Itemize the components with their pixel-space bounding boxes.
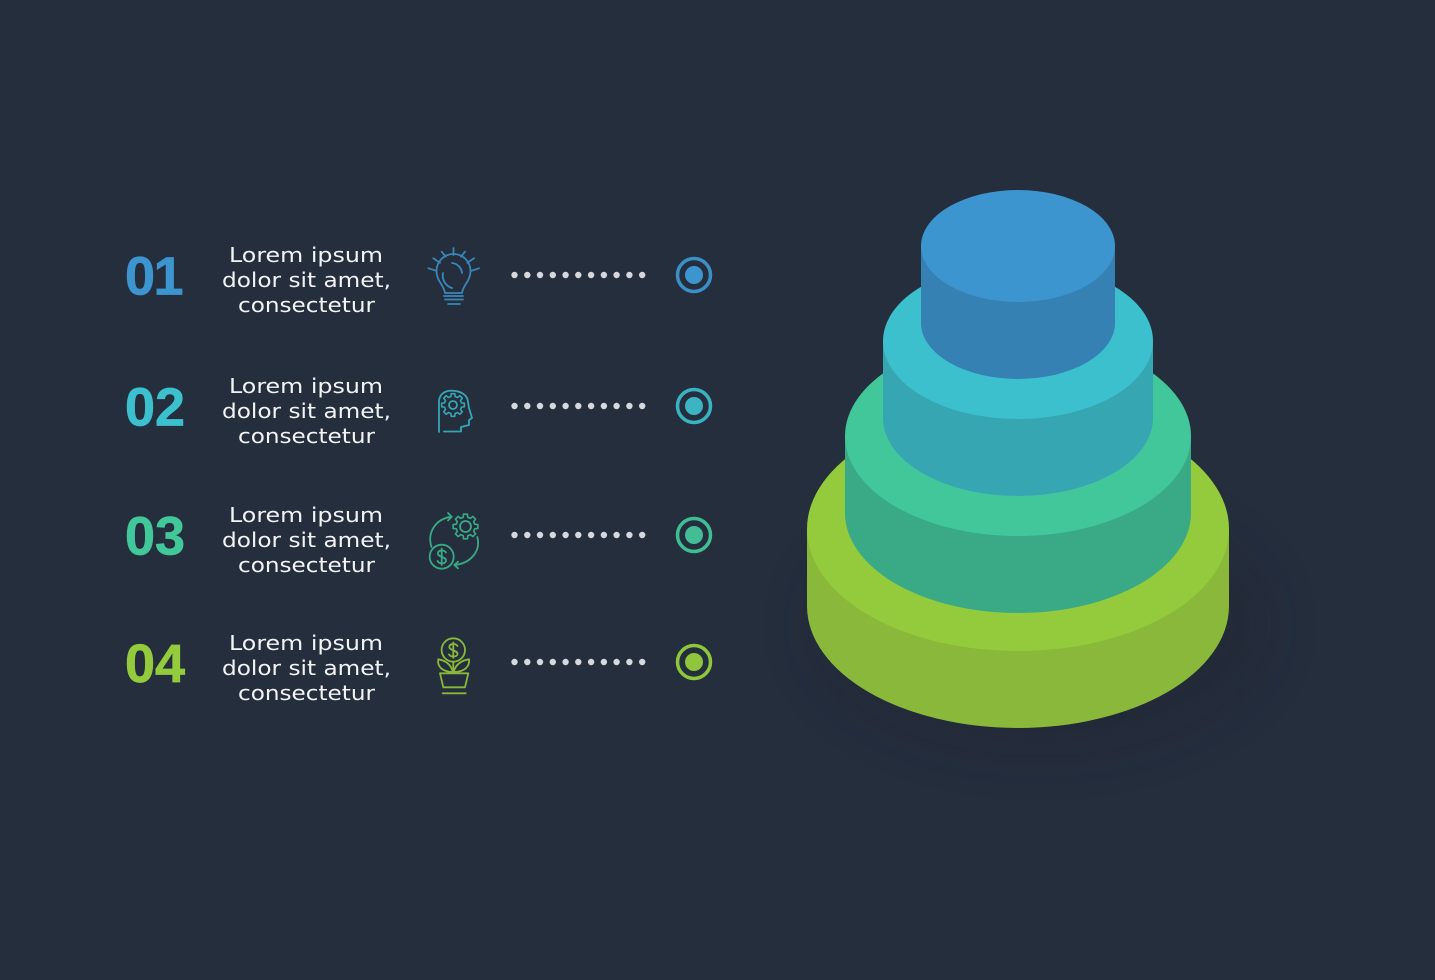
- icon: money plant: [438, 638, 469, 693]
- text block 3: [222, 503, 391, 577]
- text block 4: Lorem ipsum: [229, 631, 383, 655]
- text block 4: dolor sit amet,: [222, 656, 391, 680]
- dotted connector 2: [511, 403, 645, 409]
- text block 2: dolor sit amet,: [222, 399, 391, 423]
- text block 1: [222, 243, 391, 317]
- marker 1: [678, 258, 710, 292]
- marker 4: [678, 646, 710, 678]
- text block 3: Lorem ipsum: [229, 503, 383, 527]
- text block 3: dolor sit amet,: [222, 528, 391, 552]
- text block 1: consectetur: [238, 293, 376, 317]
- row 4: [125, 631, 710, 705]
- icon: head with gear: [439, 391, 472, 432]
- text block 3: consectetur: [238, 553, 376, 577]
- tier 4: green: [807, 407, 1229, 728]
- text block 4: consectetur: [238, 681, 376, 705]
- number 01: 01: [125, 246, 184, 306]
- text block 1: Lorem ipsum: [229, 243, 383, 267]
- drop shadow: [815, 503, 1265, 747]
- row 1: [125, 243, 710, 317]
- marker 2: [678, 390, 710, 422]
- text block 1: dolor sit amet,: [222, 268, 391, 292]
- number 04: 04: [125, 634, 185, 694]
- text block 2: [222, 374, 391, 448]
- row 2: [125, 374, 710, 448]
- number 02: 02: [125, 378, 185, 438]
- icon: gear and money cycle: [430, 513, 478, 569]
- number 03: 03: [125, 506, 185, 566]
- stacked cylinder chart: [807, 190, 1265, 747]
- tier 2: cyan: [883, 263, 1153, 496]
- text block 4: [222, 631, 391, 705]
- row 3: [125, 503, 710, 577]
- dotted connector 1: [511, 272, 645, 278]
- icon: light bulb: [428, 248, 479, 304]
- text block 2: consectetur: [238, 424, 376, 448]
- dotted connector 3: [511, 532, 645, 538]
- tier 3: teal green: [845, 336, 1191, 613]
- text block 2: Lorem ipsum: [229, 374, 383, 398]
- marker 3: [678, 518, 710, 552]
- dotted connector 4: [511, 659, 645, 665]
- tier 1: blue: [921, 190, 1115, 379]
